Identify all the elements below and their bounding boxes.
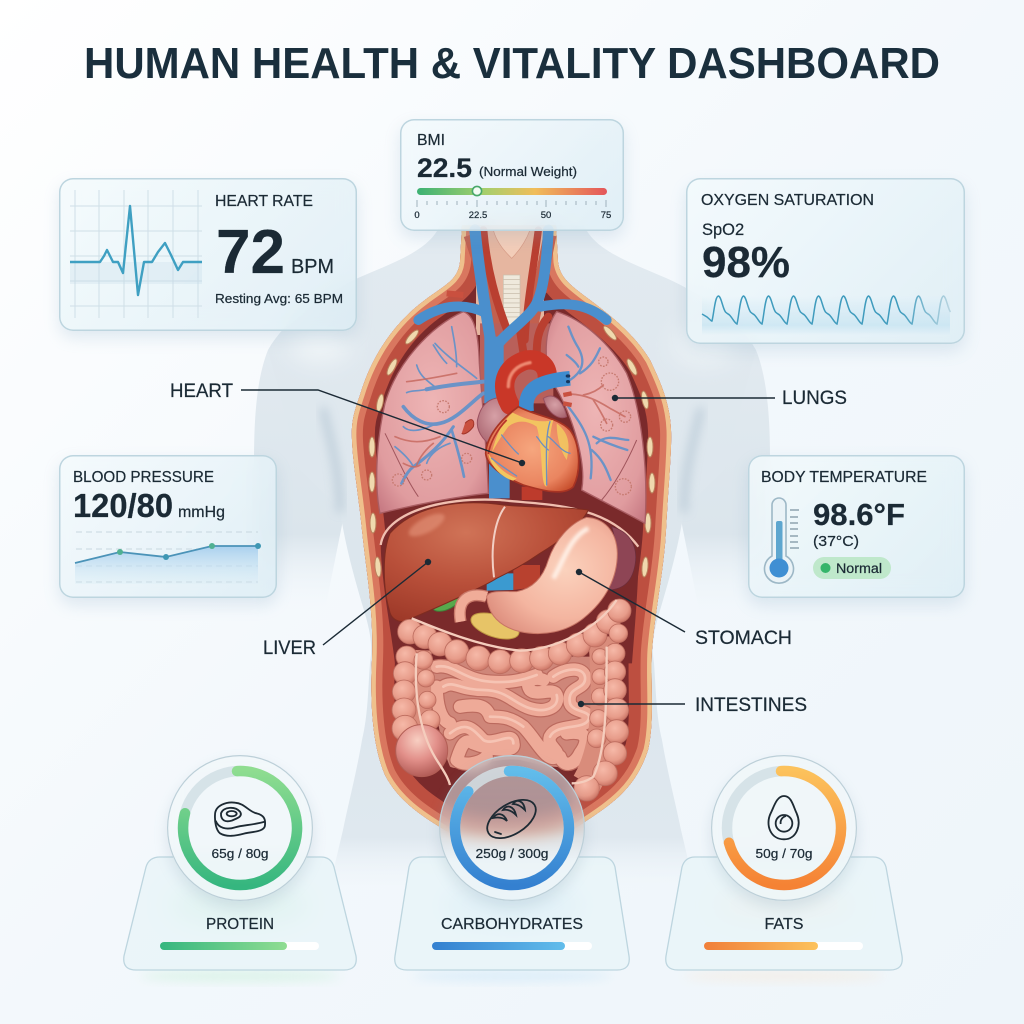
status pill (813, 557, 891, 579)
pancreas (468, 608, 522, 644)
leader line: liver (323, 559, 431, 645)
leader line: stomach (576, 569, 685, 632)
oxygen heading: OXYGEN SATURATION (701, 192, 874, 209)
heart rate value: 72 (216, 218, 285, 287)
panel: heart rate (59, 178, 357, 331)
BMI gauge: 0 (414, 210, 420, 221)
bronchial trees (395, 327, 628, 483)
panel: BMI (400, 119, 624, 231)
panel: blood pressure (59, 455, 277, 598)
neck, vessels and trachea (418, 230, 607, 500)
status pill: Normal (836, 561, 882, 576)
ECG trace (70, 206, 202, 295)
nutrition glow shadows (140, 883, 884, 982)
small intestine (437, 666, 589, 764)
torso cavity wall (352, 226, 672, 846)
BMI gauge: 75 (601, 210, 611, 221)
ribs (369, 324, 655, 577)
diaphragm and abdominal background (381, 500, 638, 663)
leader line: heart (241, 390, 525, 466)
blood pressure unit: mmHg (178, 504, 225, 521)
blood pressure heading: BLOOD PRESSURE (73, 469, 214, 486)
large intestine (416, 637, 606, 783)
carbohydrates amount: 250g / 300g (476, 847, 549, 861)
label: stomach: STOMACH (695, 628, 792, 649)
icon: steak (215, 802, 265, 836)
fats label: FATS (764, 916, 804, 933)
mediastinum backing (480, 323, 553, 403)
carbohydrates ring (455, 771, 569, 885)
fats ring (727, 771, 841, 885)
fats amount: 50g / 70g (756, 847, 813, 861)
spleen and central vessels (487, 527, 636, 591)
label: lungs: LUNGS (782, 388, 847, 409)
ECG grid (70, 190, 202, 318)
intestines (392, 599, 631, 801)
protein bar (160, 942, 319, 950)
BMI category: (Normal Weight) (479, 165, 577, 179)
label: heart: HEART (170, 381, 233, 402)
heart (462, 360, 579, 492)
oxygen value: 98% (702, 238, 790, 287)
panel: body temperature (748, 455, 965, 598)
heart rate heading: HEART RATE (215, 193, 313, 210)
label: intestines: INTESTINES (695, 695, 807, 716)
blood pressure chart (75, 532, 261, 584)
carbohydrates label: CARBOHYDRATES (441, 916, 583, 933)
icon: thermometer (764, 498, 799, 583)
BMI value: 22.5 (417, 153, 472, 183)
icon: bread loaf (481, 792, 542, 846)
fats bar (704, 942, 863, 950)
pulse waveform (702, 296, 950, 335)
BMI gauge (414, 186, 611, 221)
protein amount: 65g / 80g (212, 847, 269, 861)
protein label: PROTEIN (206, 916, 274, 933)
gallbladder (429, 586, 465, 616)
SpO2 label: SpO2 (702, 221, 744, 239)
carbohydrates bar (432, 942, 592, 950)
label: liver: LIVER (263, 638, 316, 659)
body silhouette (254, 225, 770, 885)
panel: oxygen saturation (686, 178, 965, 344)
BMI gauge: 50 (541, 210, 551, 221)
resting average: Resting Avg: 65 BPM (215, 292, 343, 306)
heart rate unit: BPM (291, 256, 334, 278)
protein ring (183, 771, 297, 885)
temperature heading: BODY TEMPERATURE (761, 469, 927, 486)
icon: avocado (768, 796, 799, 839)
BMI gauge: 22.5 (469, 210, 487, 221)
BMI heading: BMI (417, 132, 445, 149)
liver (384, 503, 588, 622)
temperature celsius: (37°C) (813, 534, 859, 550)
leader line: lungs (612, 395, 775, 401)
temperature value: 98.6°F (813, 497, 905, 532)
lungs (377, 312, 646, 523)
blood pressure value: 120/80 (73, 487, 173, 524)
title: HUMAN HEALTH & VITALITY DASHBOARD (84, 39, 940, 88)
leader line: intestines (578, 701, 685, 707)
stomach and duodenum (460, 517, 617, 634)
